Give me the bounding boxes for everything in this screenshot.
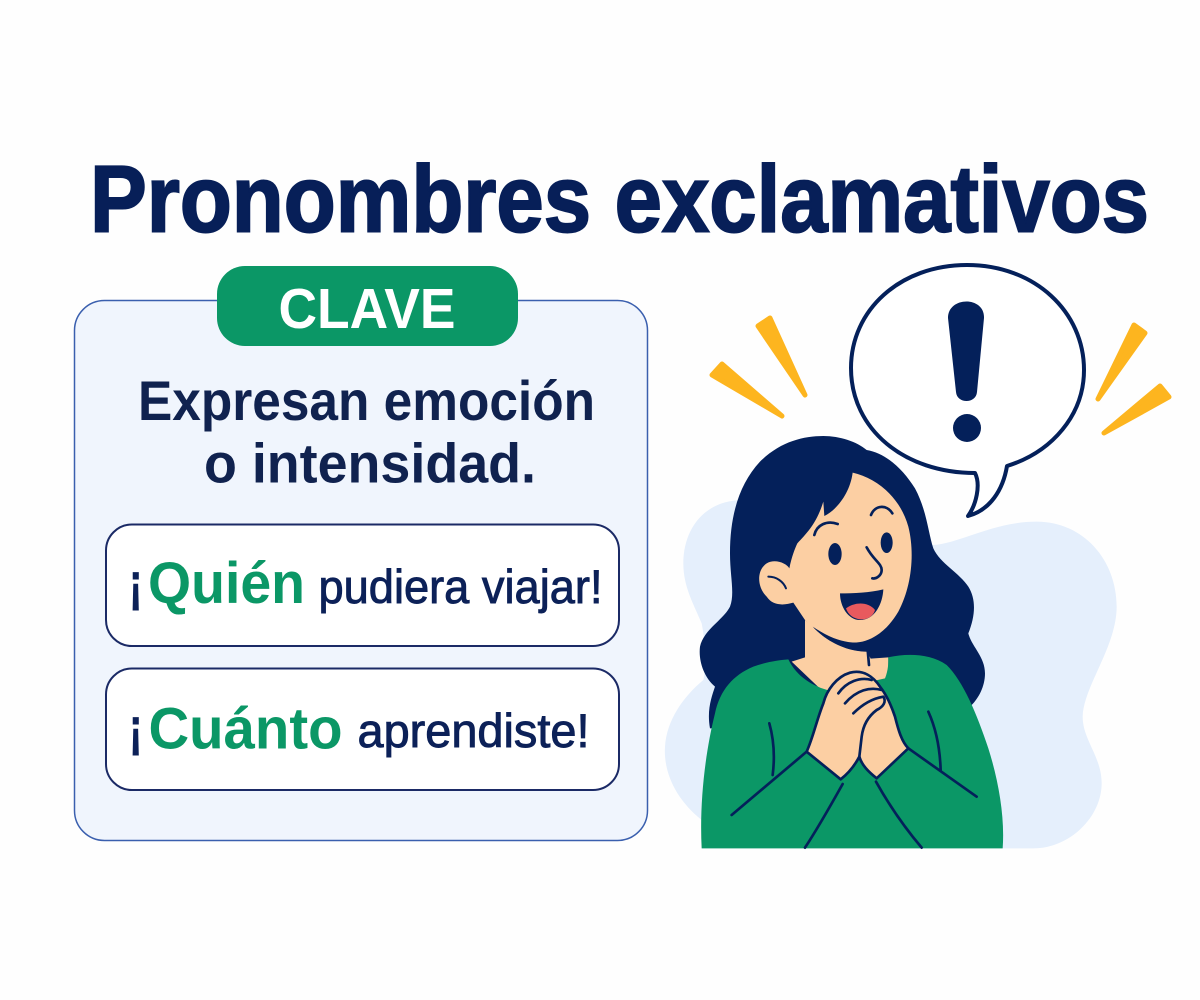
eyes [828,532,893,565]
example: cuánto: ¡ [128,696,143,758]
example: quién [106,524,619,646]
rays left [712,318,805,416]
speech bubble [851,265,1084,516]
illustration: excited woman [700,436,1003,848]
panel background [74,300,648,840]
example: quién: pudiera viajar! [318,560,602,613]
mouth [840,589,883,620]
example: quién: Quién [148,551,305,616]
rays right [1098,325,1169,433]
example: cuánto [106,668,619,790]
neck [792,620,888,695]
example: cuánto: Cuánto [148,696,342,761]
panel: clave [74,266,648,840]
example: quién: ¡ [128,550,143,614]
badge: clave: CLAVE [278,277,456,341]
key text: Expresan emoción [138,369,595,432]
sleeve lines [732,712,977,848]
facial features [768,507,892,665]
exclamation mark [948,302,984,442]
jaw line [813,627,870,652]
face [759,473,912,643]
key text: o intensidad. [204,432,536,494]
hands [807,672,908,779]
key text [138,369,595,494]
sweater [701,655,1003,848]
background blob [665,500,1117,848]
hair [700,436,985,728]
example: cuánto: aprendiste! [358,704,590,757]
badge: clave [217,266,518,346]
